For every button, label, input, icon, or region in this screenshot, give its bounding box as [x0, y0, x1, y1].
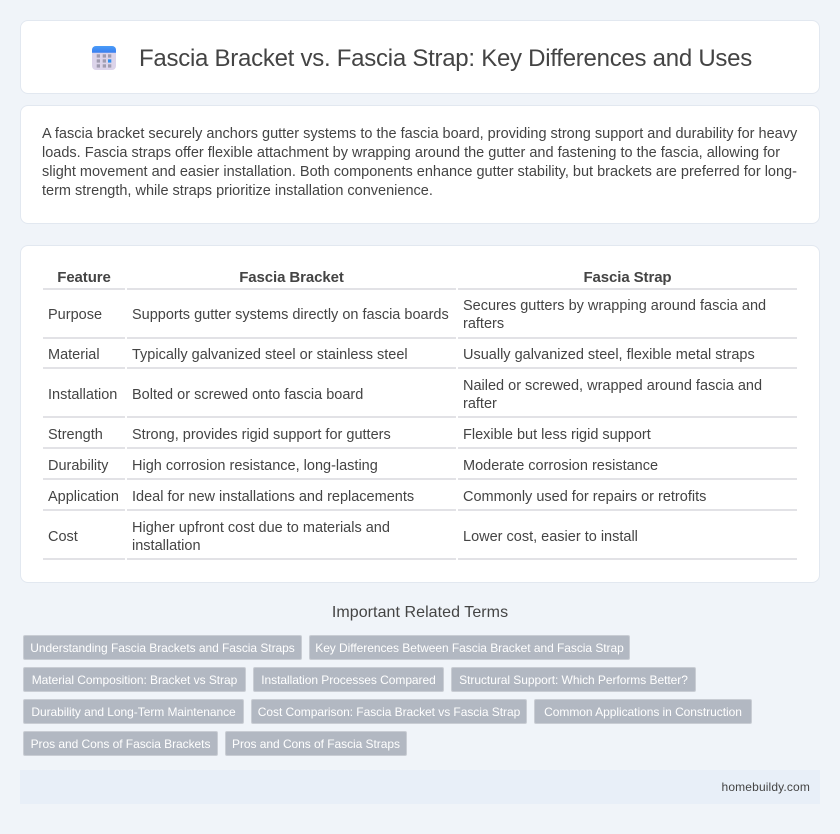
footer bar: [20, 770, 820, 804]
row: cost: Cost: [48, 529, 78, 545]
intro panel: [20, 105, 820, 224]
intro text: slight movement and easier installation. Both components enhance gutter stability, but brackets are preferred for long-: [42, 164, 797, 180]
comparison table panel: [20, 245, 820, 583]
row: material: Material: [48, 347, 100, 363]
row: purpose: Supports gutter systems directly on fascia boards: [132, 307, 449, 323]
title: Fascia Bracket vs. Fascia Strap: Key Differences and Uses: [139, 45, 752, 72]
related term tags: [23, 635, 752, 756]
row: durability: Moderate corrosion resistance: [463, 458, 658, 474]
intro text: [42, 126, 798, 199]
intro text: A fascia bracket securely anchors gutter systems to the fascia board, providing strong support and durability for heavy: [42, 126, 797, 142]
row: cost: installation: [132, 538, 201, 554]
row: cost: [48, 520, 638, 554]
row: cost: Lower cost, easier to install: [463, 529, 638, 545]
comparison table: [43, 269, 797, 560]
row: strength: Strength: [48, 427, 103, 443]
row: application: Application: [48, 489, 119, 505]
row: strength: Flexible but less rigid support: [463, 427, 651, 443]
icon: calendar: [92, 46, 116, 70]
related term tags: Durability and Long-Term Maintenance: [31, 705, 236, 719]
row: application: Commonly used for repairs or retrofits: [463, 489, 706, 505]
intro text: term strength, while straps prioritize installation convenience.: [42, 183, 433, 199]
related term tags: Pros and Cons of Fascia Straps: [232, 737, 400, 751]
related term tags: Understanding Fascia Brackets and Fascia Straps: [30, 641, 295, 655]
table header: [57, 269, 672, 286]
row: cost: Higher upfront cost due to materials and: [132, 520, 390, 536]
row: durability: [48, 458, 658, 474]
table header: Feature: [57, 269, 111, 286]
row: installation: Bolted or screwed onto fascia board: [132, 387, 363, 403]
related term tags: Structural Support: Which Performs Better?: [459, 673, 688, 687]
row: durability: High corrosion resistance, long-lasting: [132, 458, 378, 474]
row: installation: rafter: [463, 396, 497, 412]
table header: Fascia Strap: [583, 269, 672, 286]
related term tags: Installation Processes Compared: [261, 673, 436, 687]
row: material: [48, 347, 755, 363]
row: material: Typically galvanized steel or stainless steel: [132, 347, 408, 363]
related term tags: Key Differences Between Fascia Bracket and Fascia Strap: [315, 641, 624, 655]
footer source: homebuildy.com: [722, 780, 810, 794]
row: material: Usually galvanized steel, flexible metal straps: [463, 347, 755, 363]
row: application: Ideal for new installations and replacements: [132, 489, 414, 505]
row: strength: [48, 427, 651, 443]
table header: Fascia Bracket: [239, 269, 344, 286]
row: strength: Strong, provides rigid support for gutters: [132, 427, 391, 443]
row: purpose: [48, 298, 766, 332]
intro text: loads. Fascia straps offer flexible attachment by wrapping around the gutter and fastening to the fascia, allowing for: [42, 145, 780, 161]
row: application: [48, 489, 706, 505]
related term tags: Pros and Cons of Fascia Brackets: [31, 737, 210, 751]
related terms heading: Important Related Terms: [332, 604, 508, 621]
related term tags: Cost Comparison: Fascia Bracket vs Fascia Strap: [258, 705, 520, 719]
related term tags: Common Applications in Construction: [544, 705, 742, 719]
row: purpose: Secures gutters by wrapping around fascia and: [463, 298, 766, 314]
row: durability: Durability: [48, 458, 108, 474]
row: installation: Installation: [48, 387, 117, 403]
header panel: [20, 20, 820, 94]
row: installation: Nailed or screwed, wrapped around fascia and: [463, 378, 762, 394]
row: purpose: Purpose: [48, 307, 102, 323]
row: installation: [48, 378, 762, 412]
row: purpose: rafters: [463, 316, 504, 332]
related term tags: Material Composition: Bracket vs Strap: [32, 673, 237, 687]
